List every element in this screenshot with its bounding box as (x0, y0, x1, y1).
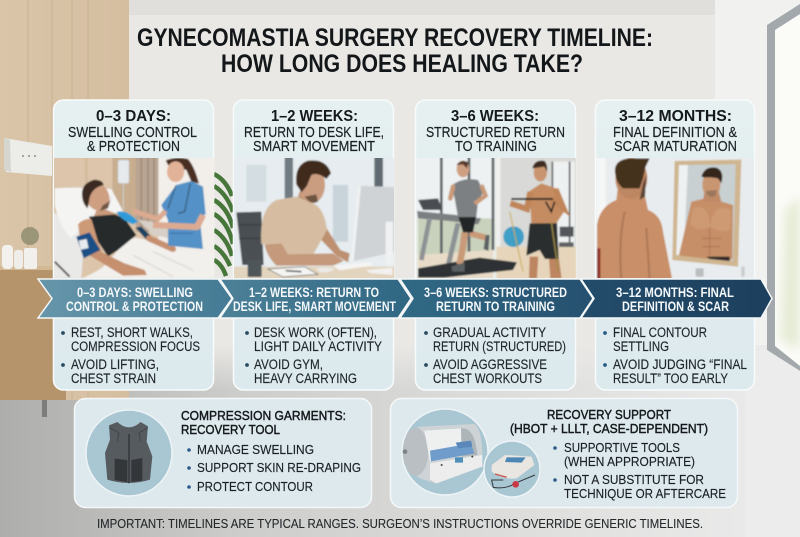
card background (416, 100, 576, 390)
bullet list: compression garments: SUPPORT SKIN RE-DRAPING (197, 460, 361, 475)
heading: 3–6 weeks: STRUCTURED RETURN (426, 125, 565, 141)
heading: compression garments: COMPRESSION GARMENTS: (181, 408, 346, 423)
heading: compression garments: RECOVERY TOOL (181, 422, 280, 437)
footer note: IMPORTANT: TIMELINES ARE TYPICAL RANGES. SURGEON’S INSTRUCTIONS OVERRIDE GENERIC TIMELINES. (97, 516, 703, 531)
photo: man at desk in compression top (233, 155, 396, 280)
bullet list: 0–3 days (61, 325, 200, 386)
photo: treadmill and resistance band training (413, 155, 576, 280)
heading: recovery support: RECOVERY SUPPORT (547, 407, 671, 422)
bullet list: 3–6 weeks: GRADUAL ACTIVITY (433, 325, 546, 340)
heading: 0–3 days: SWELLING CONTROL (68, 125, 197, 141)
bullet list: recovery support: NOT A SUBSTITUTE FOR (564, 472, 704, 487)
bullet list: 3–12 months: FINAL CONTOUR (613, 325, 707, 340)
card background (596, 100, 754, 390)
icon: low-level laser device (484, 441, 540, 497)
timeline arrow: 0–3 days: 0–3 DAYS: SWELLING (77, 285, 193, 300)
timeline arrow: 3–6 weeks: RETURN TO TRAINING (436, 299, 555, 314)
heading: 0–3 days: 0–3 DAYS: (96, 108, 171, 125)
heading: 1–2 weeks: RETURN TO DESK LIFE, (244, 125, 384, 141)
bullet list: 3–12 months: SETTLING (613, 339, 669, 354)
heading: recovery support: (HBOT + LLLT, CASE-DEPENDENT) (510, 421, 708, 436)
timeline arrow: 1–2 weeks (220, 279, 411, 318)
panel: 3–12 months (593, 100, 756, 390)
panel: recovery support (390, 398, 738, 508)
panel: compression garments (74, 398, 372, 508)
timeline arrow: 0–3 days (38, 279, 232, 318)
bullet list: recovery support: TECHNIQUE OR AFTERCARE (564, 486, 726, 501)
panel: 0–3 days (53, 100, 216, 390)
bullet list: recovery support (553, 440, 726, 501)
heading: 1–2 weeks: 1–2 WEEKS: (271, 108, 358, 125)
timeline arrow: 1–2 weeks: DESK LIFE, SMART MOVEMENT (233, 299, 397, 314)
timeline arrow: 0–3 days: CONTROL & PROTECTION (66, 299, 203, 314)
bullet list: recovery support: SUPPORTIVE TOOLS (564, 440, 680, 455)
bullet list: 3–6 weeks (424, 325, 566, 386)
bullet list: 3–12 months (603, 325, 747, 386)
heading: 3–12 months (613, 108, 737, 155)
bullet list: compression garments: MANAGE SWELLING (197, 442, 314, 457)
bullet list: 0–3 days: COMPRESSION FOCUS (71, 339, 200, 354)
bullet list: 1–2 weeks: HEAVY CARRYING (254, 371, 357, 386)
bullet list: 3–6 weeks: AVOID AGGRESSIVE (433, 357, 547, 372)
bullet list: 3–6 weeks: RETURN (STRUCTURED) (433, 339, 566, 354)
heading: 1–2 weeks (244, 108, 384, 155)
panel: 1–2 weeks (233, 100, 396, 390)
title (137, 24, 653, 78)
timeline arrow: 3–6 weeks (400, 279, 593, 318)
timeline arrow: 3–12 months: 3–12 MONTHS: FINAL (616, 285, 734, 300)
timeline arrow: 3–12 months: DEFINITION & SCAR (622, 299, 729, 314)
icon: hyperbaric chamber (402, 409, 488, 495)
bullet list: 3–6 weeks: CHEST WORKOUTS (433, 371, 542, 386)
heading: 3–6 weeks (426, 108, 565, 155)
panel: 3–6 weeks (413, 100, 576, 390)
heading: 3–6 weeks: 3–6 WEEKS: (451, 108, 539, 125)
timeline arrow: 3–12 months (581, 279, 772, 318)
title: GYNECOMASTIA SURGERY RECOVERY TIMELINE: (137, 24, 653, 52)
title: HOW LONG DOES HEALING TAKE? (221, 50, 583, 78)
photo: patient resting with nurse (53, 155, 216, 280)
heading: 0–3 days (68, 108, 197, 155)
photo: man viewing results in mirror (593, 155, 756, 280)
timeline arrow: 3–6 weeks: 3–6 WEEKS: STRUCTURED (424, 285, 567, 300)
bullet list: recovery support: (WHEN APPROPRIATE) (564, 454, 695, 469)
card background (54, 100, 214, 390)
panel background (74, 398, 372, 508)
bullet list: 0–3 days: AVOID LIFTING, (71, 357, 159, 372)
bullet list: 1–2 weeks: DESK WORK (OFTEN), (254, 325, 377, 340)
timeline arrow: 1–2 weeks: 1–2 WEEKS: RETURN TO (249, 285, 379, 300)
heading: 3–12 months: SCAR MATURATION (614, 139, 737, 155)
bullet list: 1–2 weeks: AVOID GYM, (254, 357, 323, 372)
heading: 3–12 months: FINAL DEFINITION & (613, 125, 737, 141)
heading: compression garments (181, 408, 346, 437)
heading: 0–3 days: & PROTECTION (87, 139, 180, 155)
bullet list: compression garments: PROTECT CONTOUR (197, 479, 313, 494)
bullet list: 0–3 days: CHEST STRAIN (71, 371, 156, 386)
bullet list: 1–2 weeks (245, 325, 382, 386)
bullet list: compression garments (187, 442, 361, 494)
panel background (390, 398, 738, 508)
heading: 1–2 weeks: SMART MOVEMENT (253, 139, 375, 155)
card background (234, 100, 394, 390)
heading: 3–12 months: 3–12 MONTHS: (619, 108, 732, 125)
heading: recovery support (510, 407, 708, 436)
bullet list: 3–12 months: AVOID JUDGING “FINAL (613, 357, 747, 372)
bullet list: 3–12 months: RESULT” TOO EARLY (613, 371, 728, 386)
icon: compression vest (86, 410, 172, 496)
bullet list: 1–2 weeks: LIGHT DAILY ACTIVITY (254, 339, 382, 354)
heading: 3–6 weeks: TO TRAINING (455, 139, 537, 155)
bullet list: 0–3 days: REST, SHORT WALKS, (71, 325, 193, 340)
